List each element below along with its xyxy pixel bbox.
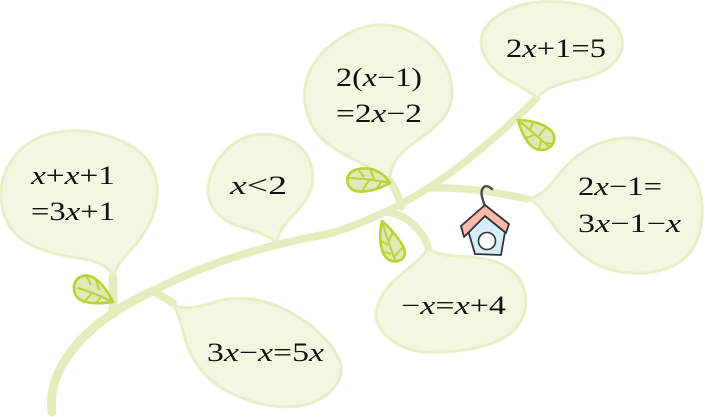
equation text: =3 x+1 (31, 197, 115, 226)
hook (482, 186, 492, 206)
bubble: x+x+1=3x+1 (1, 131, 157, 277)
equation text: 3x−1− x (578, 209, 682, 238)
equation text: x+x+1 (30, 161, 115, 190)
bubble: x<2 (208, 134, 313, 243)
equation text: −x=x+4 (401, 291, 506, 320)
equation text: =2 x−2 (336, 99, 422, 128)
equation text: 2(x−1) (336, 63, 422, 92)
equation text: x<2 (229, 171, 287, 200)
leaf: below junction (380, 221, 405, 262)
leaf: centre (347, 168, 390, 193)
leaf: lower left (74, 275, 113, 303)
vine stems (51, 98, 537, 412)
entrance hole (478, 232, 496, 250)
house body (468, 216, 505, 255)
equation text: 3x−x=5 x (207, 338, 325, 367)
bubble: 2x+1=5 (481, 2, 622, 98)
bubble: 2x-1=3x-1-x (527, 138, 702, 273)
bubble: -x=x+4 (376, 248, 526, 352)
roof (461, 205, 509, 237)
equation text: 2x+1=5 (506, 34, 606, 63)
equation text: 2x−1= (578, 172, 662, 201)
bubble: 3x-x=5x (173, 298, 341, 407)
birdhouse (461, 186, 509, 255)
bubble: 2(x-1)=2x-2 (304, 25, 452, 180)
leaf: upper right (518, 120, 554, 150)
